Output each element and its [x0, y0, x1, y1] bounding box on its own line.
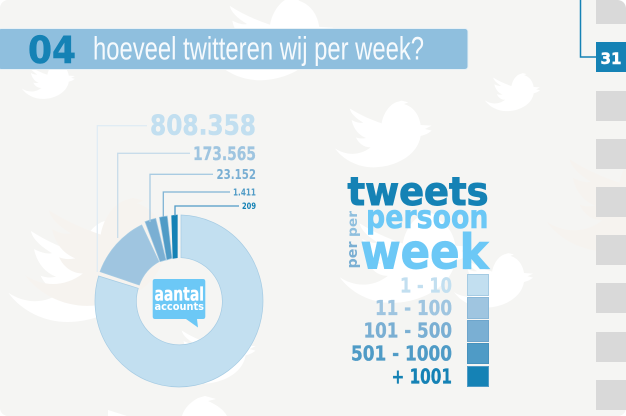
legend: 501-1000: 501 - 1000 — [351, 342, 452, 366]
segment: 1-10 — [95, 215, 263, 387]
donut chart — [95, 215, 263, 387]
heading: tweets per persoon per week: week — [360, 224, 489, 280]
leader lines — [97, 126, 239, 272]
heading: tweets per persoon per week: persoon — [366, 198, 488, 236]
title: hoeveel twitteren wij per week? — [93, 30, 424, 66]
account numbers: 808.358 — [150, 108, 256, 142]
speech bubble: aantal accounts — [153, 279, 205, 328]
legend: 101-500: 101 - 500 — [364, 319, 452, 343]
segment: 11-100 — [100, 225, 159, 285]
account numbers: 23.152 — [216, 168, 256, 183]
page tabs — [596, 0, 626, 410]
speech bubble: aantal accounts: accounts — [154, 300, 204, 313]
speech bubble: aantal accounts: aantal — [154, 284, 204, 306]
heading: tweets per persoon per week: tweets — [348, 170, 488, 215]
heading: tweets per persoon per week: per — [346, 210, 361, 237]
account numbers — [150, 108, 256, 212]
header bar — [0, 28, 468, 72]
account numbers: 173.565 — [193, 143, 256, 165]
legend — [351, 273, 488, 388]
segment: 501-1000 — [159, 216, 172, 260]
legend: 1-10: 1 - 10 — [400, 273, 452, 297]
heading: tweets per persoon per week — [345, 170, 489, 280]
page number tab — [580, 0, 626, 72]
segment: 101-500 — [145, 218, 166, 262]
account numbers: 209 — [242, 202, 256, 212]
page number tab: 31 — [600, 49, 622, 68]
account numbers: 1.411 — [233, 188, 256, 199]
legend: +1001: + 1001 — [392, 364, 452, 388]
segment: +1001 — [172, 215, 177, 258]
legend: 11-100: 11 - 100 — [375, 296, 452, 320]
section number: 04 — [28, 29, 76, 72]
heading: tweets per persoon per week: per — [345, 241, 361, 268]
